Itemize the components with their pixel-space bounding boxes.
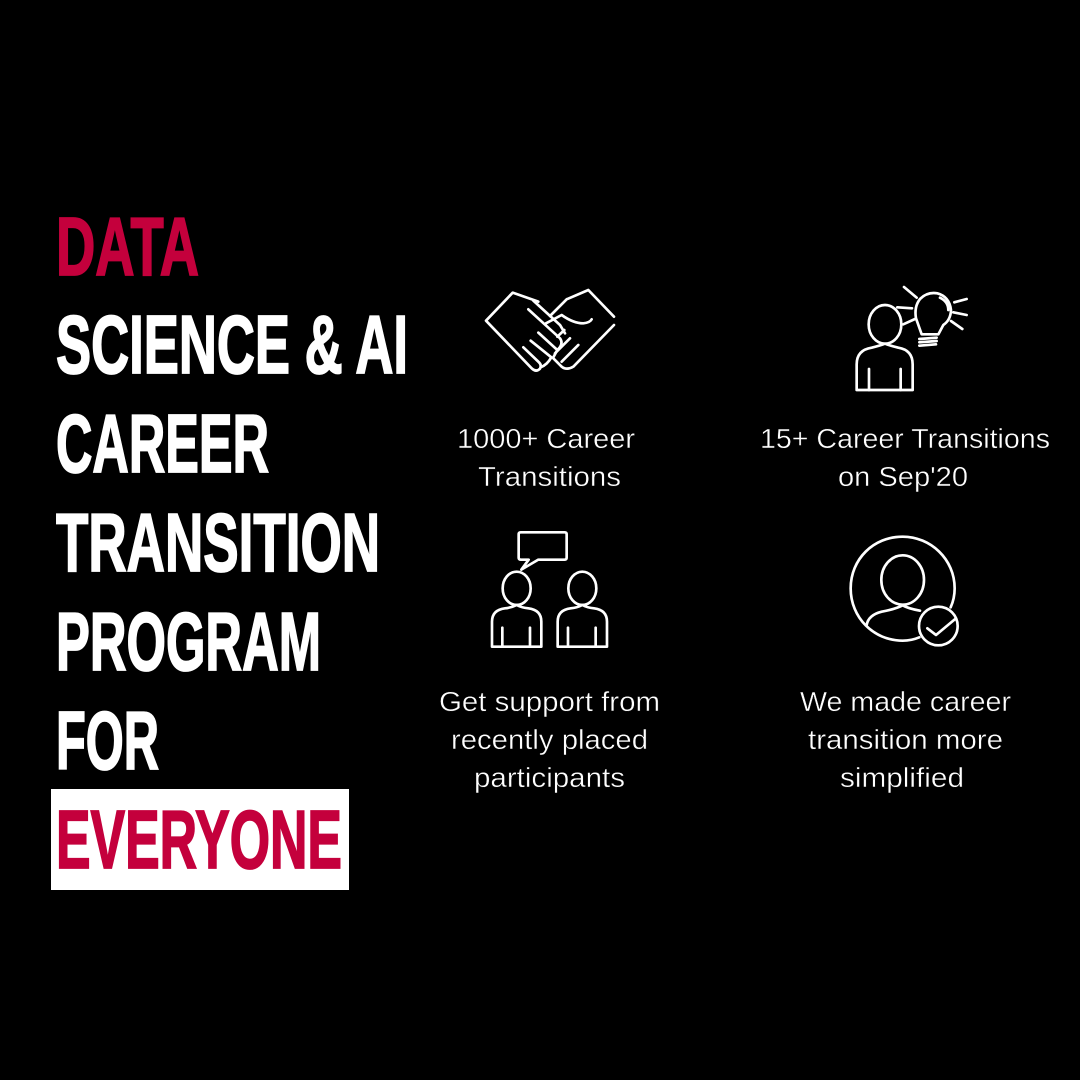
- label: 1000+ Career Transitions: 1000+ Career: [457, 423, 635, 454]
- icon: handshake: [486, 290, 614, 371]
- label: 1000+ Career Transitions: Transitions: [478, 461, 621, 492]
- text: TRANSITION: [56, 496, 380, 589]
- highlighted word: EVERYONE: [51, 789, 349, 890]
- text: PROGRAM: [56, 595, 321, 688]
- title: [51, 200, 408, 890]
- title: FOR: [56, 694, 159, 787]
- label: 15+ Career Transitions on Sep'20: [760, 423, 1050, 492]
- label: Get support from recently placed participants: [439, 686, 660, 793]
- title: CAREER: [56, 397, 269, 490]
- text: EVERYONE: [56, 793, 342, 886]
- icon: two people with speech bubble: [492, 532, 607, 647]
- label: 1000+ Career Transitions: [457, 423, 635, 492]
- label: We made career transition more simplified: simplified: [840, 762, 964, 793]
- label: 15+ Career Transitions on Sep'20: on Sep'20: [838, 461, 968, 492]
- label: We made career transition more simplified: [800, 686, 1011, 793]
- title: DATA: [56, 200, 199, 293]
- label: Get support from recently placed participants: participants: [474, 762, 625, 793]
- icon: user profile with check mark: [851, 537, 958, 645]
- label: We made career transition more simplified: We made career: [800, 686, 1011, 717]
- label: Get support from recently placed participants: Get support from: [439, 686, 660, 717]
- icon: person with lightbulb: [857, 287, 967, 390]
- label: Get support from recently placed participants: recently placed: [451, 724, 648, 755]
- label: 15+ Career Transitions on Sep'20: 15+ Career Transitions: [760, 423, 1050, 454]
- label: We made career transition more simplified: transition more: [808, 724, 1003, 755]
